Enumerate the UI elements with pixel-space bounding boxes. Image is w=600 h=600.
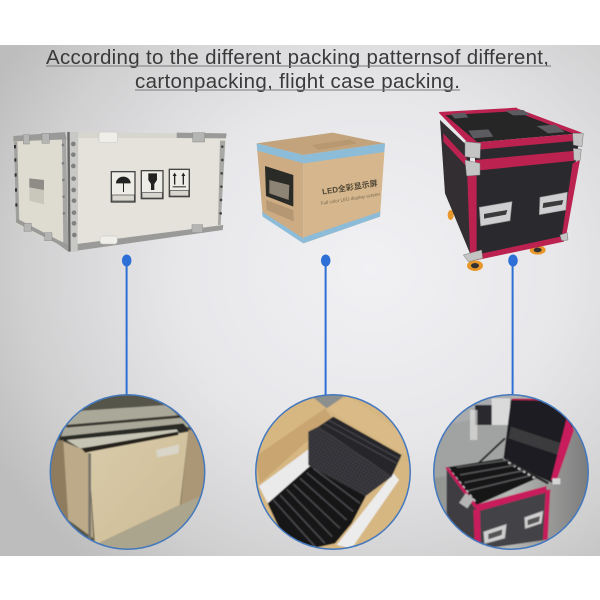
title bbox=[46, 46, 551, 93]
case side face bbox=[440, 120, 471, 255]
foam strips bbox=[259, 449, 313, 506]
crate metal frame bbox=[13, 132, 227, 252]
case lid top bbox=[439, 108, 580, 143]
carton front face bbox=[303, 143, 385, 243]
crate clasps bbox=[23, 132, 205, 244]
carton top face bbox=[257, 133, 385, 155]
handling symbols bbox=[111, 169, 189, 202]
carton box product image bbox=[257, 133, 385, 243]
case pink trim bbox=[439, 108, 582, 260]
open lid bbox=[503, 397, 573, 483]
connector: carton to interior photo bbox=[321, 254, 331, 396]
packed modules bbox=[447, 458, 537, 505]
case lid handles bbox=[451, 110, 565, 138]
case wheels bbox=[448, 210, 546, 271]
crate left face bbox=[14, 134, 68, 250]
carton product text: LED全彩显示屏 bbox=[321, 178, 378, 196]
flight case product image bbox=[439, 108, 583, 271]
crate front face bbox=[68, 133, 226, 252]
carton left face bbox=[257, 143, 303, 243]
carton product text bbox=[318, 178, 381, 206]
carton blue bands bbox=[257, 143, 385, 243]
title: According to the different packing patternsof different, bbox=[46, 46, 549, 69]
lying modules bbox=[268, 466, 366, 550]
circle photo: carton with LED modules bbox=[255, 394, 411, 550]
connector: crate to interior photo bbox=[122, 254, 132, 396]
circle photo: plywood crates bbox=[50, 394, 206, 550]
title: cartonpacking, flight case packing. bbox=[135, 70, 460, 93]
standing modules bbox=[318, 417, 402, 477]
carton side label bbox=[265, 166, 293, 207]
case handles bbox=[483, 524, 507, 544]
case corners bbox=[463, 133, 583, 262]
wooden crate product image bbox=[13, 132, 227, 252]
case body bbox=[446, 470, 477, 540]
circle photo: open flight case bbox=[433, 394, 589, 550]
case front handles bbox=[479, 192, 567, 226]
connector: flight case to interior photo bbox=[508, 254, 518, 396]
case front face bbox=[475, 135, 580, 257]
carton product text: Full color LED display screen bbox=[320, 191, 381, 206]
